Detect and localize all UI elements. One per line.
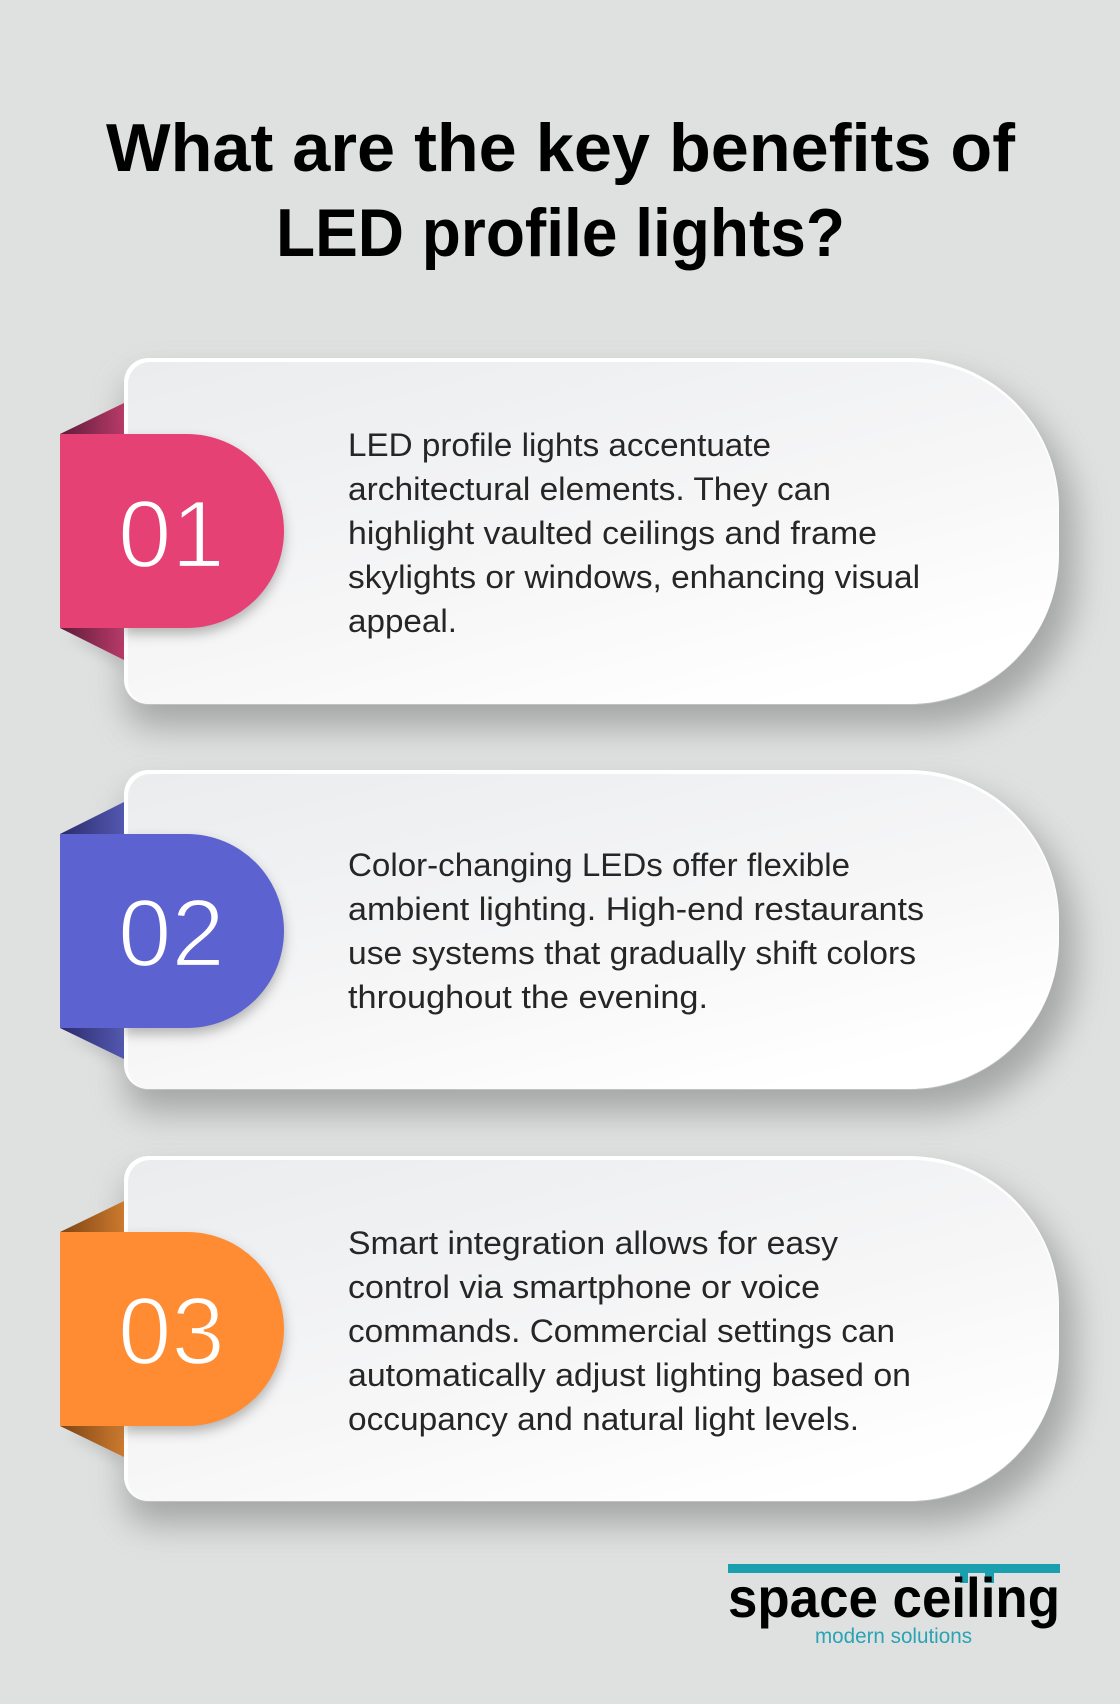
number badge 2: 02 xyxy=(118,880,225,987)
benefit text 2: throughout the evening. xyxy=(348,979,708,1015)
benefit text 3: occupancy and natural light levels. xyxy=(348,1401,859,1437)
benefit text 2: use systems that gradually shift colors xyxy=(348,935,916,971)
title: What are the key benefits of xyxy=(106,110,1015,186)
number badge 1: 01 xyxy=(118,481,225,588)
benefit text 2: Color-changing LEDs offer flexible xyxy=(348,847,850,883)
ribbon folds 3 xyxy=(60,1201,124,1457)
benefit text 3: Smart integration allows for easy xyxy=(348,1225,838,1261)
number badge 2 xyxy=(60,834,284,1034)
benefit text 1: architectural elements. They can xyxy=(348,471,831,507)
benefit text 1 xyxy=(348,427,920,639)
title xyxy=(106,110,1015,271)
panel: benefit 2 xyxy=(60,770,1075,1112)
benefit text 1: highlight vaulted ceilings and frame xyxy=(348,515,877,551)
panel: benefit 3 xyxy=(60,1156,1075,1524)
logo: space ceiling: space ceiling xyxy=(728,1566,1060,1629)
benefit text 2 xyxy=(348,847,924,1015)
number badge 3: 03 xyxy=(118,1278,225,1385)
benefit text 1: skylights or windows, enhancing visual xyxy=(348,559,920,595)
benefit text 1: LED profile lights accentuate xyxy=(348,427,771,463)
logo: space ceiling: modern solutions xyxy=(815,1625,972,1648)
panel: benefit 1 xyxy=(60,358,1075,727)
benefit text 3: control via smartphone or voice xyxy=(348,1269,820,1305)
benefit text 3: commands. Commercial settings can xyxy=(348,1313,895,1349)
ribbon folds 2 xyxy=(60,802,124,1059)
ribbon folds 1 xyxy=(60,403,124,660)
benefit text 3: automatically adjust lighting based on xyxy=(348,1357,911,1393)
number badge 3 xyxy=(60,1232,284,1432)
benefit text 1: appeal. xyxy=(348,603,457,639)
title: LED profile lights? xyxy=(276,195,845,271)
number badge 1 xyxy=(60,434,284,634)
benefit text 2: ambient lighting. High-end restaurants xyxy=(348,891,924,927)
benefit text 3 xyxy=(348,1225,911,1437)
